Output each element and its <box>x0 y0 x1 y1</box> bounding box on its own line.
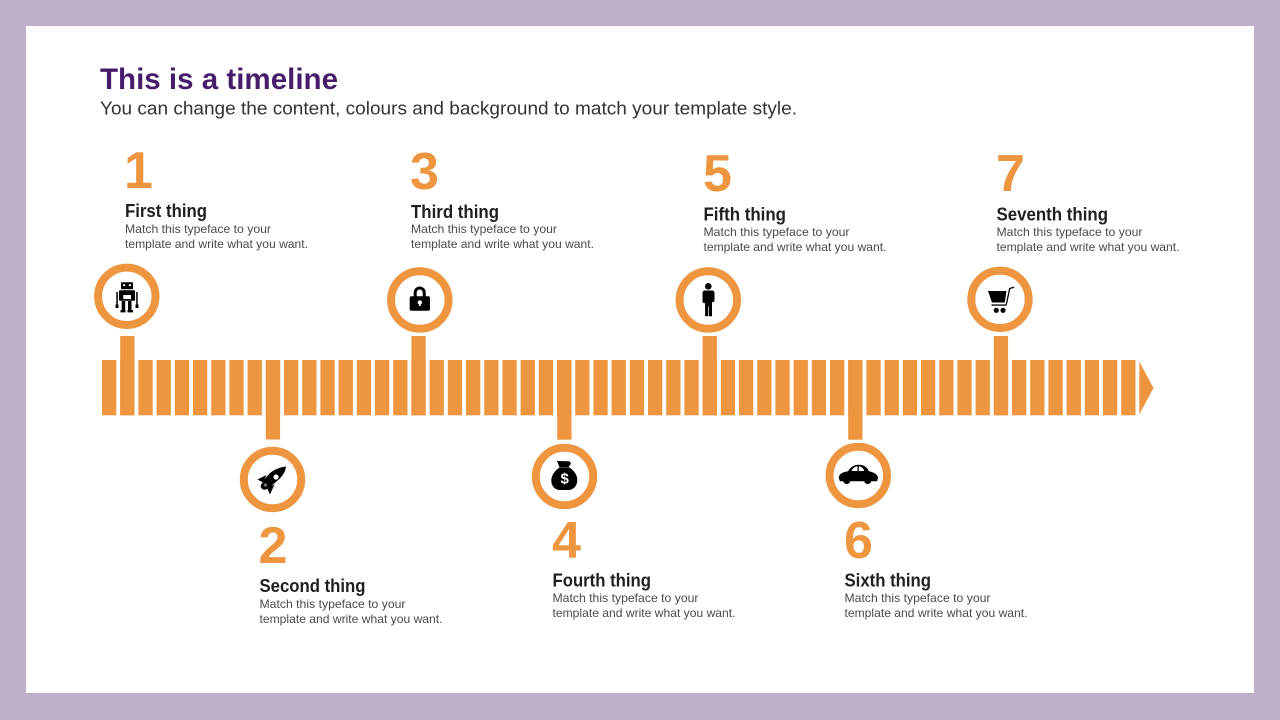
heading: fifth thing: Fifth thing <box>704 204 786 224</box>
number 3: 3 <box>410 143 439 201</box>
number 1: 1 <box>124 142 153 200</box>
heading: sixth thing: Sixth thing <box>844 570 931 590</box>
description 6: template and write what you want. <box>844 606 1028 620</box>
description 6: Match this typeface to your <box>844 591 990 605</box>
milestone 4 <box>536 360 736 620</box>
milestone 3 <box>391 143 594 415</box>
milestone 2 <box>244 360 442 626</box>
icon: person <box>703 283 714 316</box>
number 4: 4 <box>552 512 581 570</box>
description 1: template and write what you want. <box>125 237 308 251</box>
description 3: template and write what you want. <box>411 237 594 251</box>
heading: third thing: Third thing <box>411 202 499 222</box>
description 1: Match this typeface to your <box>125 222 271 236</box>
icon: padlock <box>410 288 430 311</box>
description 5: template and write what you want. <box>704 240 886 254</box>
description 2: template and write what you want. <box>260 612 442 626</box>
description 7: Match this typeface to your <box>996 225 1142 239</box>
milestone 5 <box>680 145 886 415</box>
subtitle: You can change the content, colours and background to match your template style. <box>100 98 797 118</box>
heading: second thing: Second thing <box>260 576 366 596</box>
icon: robot <box>116 282 138 312</box>
heading: fourth thing: Fourth thing <box>552 570 651 590</box>
description 4: Match this typeface to your <box>552 591 698 605</box>
number 7: 7 <box>996 145 1025 203</box>
milestone 1 <box>98 142 308 415</box>
description 2: Match this typeface to your <box>260 597 406 611</box>
number 2: 2 <box>258 517 287 575</box>
icon: car <box>839 465 878 484</box>
number 5: 5 <box>703 145 732 203</box>
icon: rocket <box>258 466 286 494</box>
heading: seventh thing: Seventh thing <box>996 204 1108 224</box>
description 4: template and write what you want. <box>552 606 736 620</box>
description 3: Match this typeface to your <box>411 222 557 236</box>
icon: money bag <box>551 461 577 490</box>
timeline arrow <box>102 360 1154 415</box>
heading: first thing: First thing <box>125 201 207 221</box>
milestone 6 <box>830 360 1028 620</box>
number 6: 6 <box>844 512 873 570</box>
icon: shopping cart <box>988 287 1014 313</box>
milestone 7 <box>971 145 1180 415</box>
description 5: Match this typeface to your <box>704 225 850 239</box>
title: This is a timeline <box>100 63 338 96</box>
description 7: template and write what you want. <box>996 240 1180 254</box>
icon: money bag: $ <box>561 470 570 488</box>
